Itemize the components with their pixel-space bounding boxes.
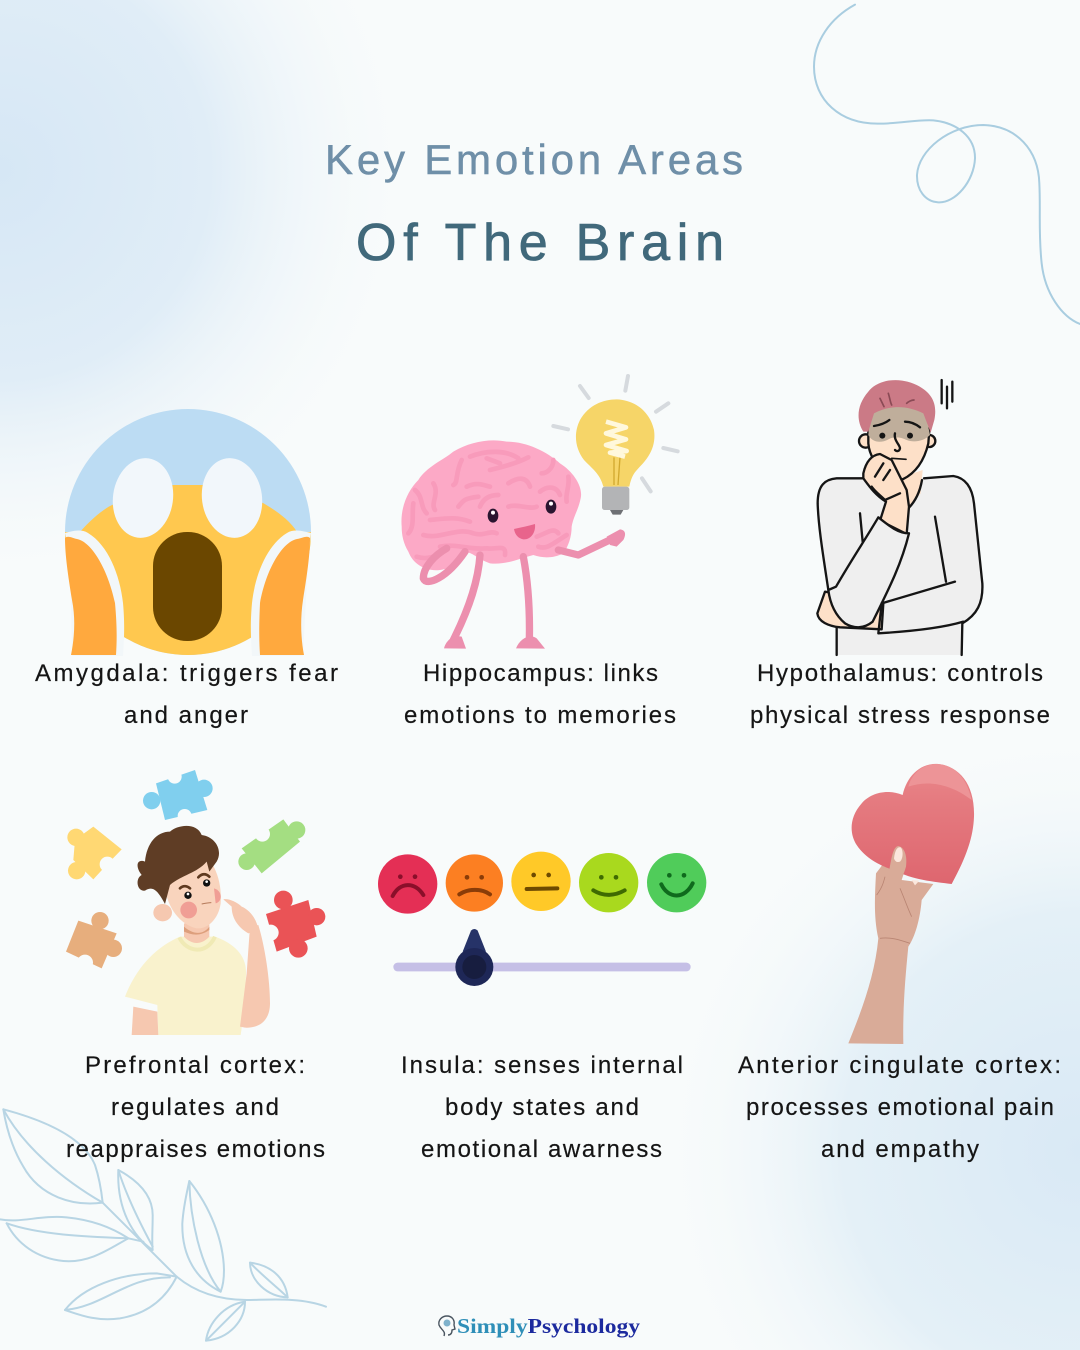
icon: brain character with light bulb — [401, 376, 678, 649]
caption: hippocampus — [404, 660, 676, 729]
decorative curl line top right — [814, 5, 1080, 324]
hair — [138, 826, 219, 904]
eyes — [108, 454, 267, 542]
icon: head — [439, 1316, 455, 1336]
caption: insula: body states and — [445, 1094, 639, 1121]
icon: screaming face — [65, 409, 311, 656]
caption: hypothalamus: Hypothalamus: controls — [757, 660, 1043, 687]
light bulb — [576, 399, 654, 487]
nose and mouth — [895, 433, 900, 451]
title — [325, 136, 743, 272]
caption: prefrontal cortex — [66, 1052, 325, 1163]
caption: hippocampus: emotions to memories — [404, 702, 676, 729]
happy face — [647, 853, 706, 912]
eye shadow band — [868, 405, 930, 442]
caption: anterior cingulate cortex — [738, 1052, 1061, 1163]
light bulb rays — [553, 376, 678, 491]
caption: hypothalamus — [750, 660, 1050, 729]
caption: anterior cingulate cortex: processes emotional pain — [746, 1094, 1054, 1121]
stress lines — [942, 380, 952, 408]
icon: mood faces with slider — [378, 852, 706, 986]
caption: anterior cingulate cortex: and empathy — [821, 1136, 979, 1163]
hands — [65, 537, 310, 655]
ear — [153, 904, 172, 921]
neutral face — [511, 852, 571, 911]
caption: hypothalamus: physical stress response — [750, 702, 1050, 729]
caption: anterior cingulate cortex: Anterior cingulate cortex: — [738, 1052, 1061, 1079]
face — [868, 412, 931, 479]
collar — [179, 937, 215, 950]
slight smile face — [579, 853, 638, 912]
icon: hand holding a heart — [848, 764, 974, 1044]
puzzle: red — [263, 891, 325, 958]
left arm — [132, 1007, 158, 1035]
caption: hippocampus: Hippocampus: links — [423, 660, 658, 687]
fingers — [889, 846, 906, 885]
slider handle — [463, 929, 486, 952]
arm — [848, 848, 933, 1044]
wordmark: Simply Psychology — [457, 1314, 640, 1338]
decorative leaf branch bottom left — [0, 1109, 326, 1341]
neck — [887, 470, 923, 508]
t-shirt — [125, 937, 246, 1035]
raised forearm sleeve — [828, 517, 909, 627]
face — [165, 860, 221, 928]
puzzle: blue — [143, 770, 213, 823]
hand lines — [877, 877, 912, 943]
puzzle: tan — [66, 912, 122, 971]
brain body — [401, 440, 581, 570]
pointing hand — [223, 899, 258, 933]
caption: prefrontal cortex: regulates and — [111, 1094, 279, 1121]
lower hand — [817, 592, 883, 629]
eyes and brows — [874, 420, 920, 427]
caption: insula — [401, 1052, 683, 1163]
puzzle: yellow — [67, 827, 122, 879]
logo: Simply Psychology — [439, 1314, 640, 1338]
mouth — [153, 532, 222, 641]
folded arm lines — [860, 513, 963, 633]
eyes and brows — [184, 892, 192, 899]
icon: anxious man biting nails — [817, 380, 982, 655]
hair — [859, 380, 935, 433]
arm — [240, 925, 270, 1028]
caption: prefrontal cortex: Prefrontal cortex: — [85, 1052, 305, 1079]
caption: insula: emotional awarness — [421, 1136, 662, 1163]
title line 2: Of The Brain — [356, 214, 724, 272]
caption: insula: Insula: senses internal — [401, 1052, 683, 1079]
neck — [184, 923, 209, 943]
white hand outlines — [65, 531, 311, 656]
heart shape — [852, 764, 974, 884]
brain face — [488, 509, 498, 523]
sweater torso — [818, 476, 982, 655]
brain folds — [408, 452, 569, 558]
icon: thinking boy with puzzle pieces — [66, 770, 325, 1035]
unhappy face — [446, 854, 503, 912]
hand at mouth — [863, 454, 909, 534]
caption: prefrontal cortex: reappraises emotions — [66, 1136, 325, 1163]
brain arms and legs — [423, 538, 613, 640]
caption: amygdala — [35, 660, 338, 729]
sad face — [378, 854, 437, 914]
caption: amygdala: and anger — [124, 702, 248, 729]
ears — [859, 434, 872, 448]
slider track — [393, 963, 691, 971]
puzzle: green — [238, 819, 305, 873]
title line 1: Key Emotion Areas — [325, 136, 743, 183]
caption: amygdala: Amygdala: triggers fear — [35, 660, 338, 687]
